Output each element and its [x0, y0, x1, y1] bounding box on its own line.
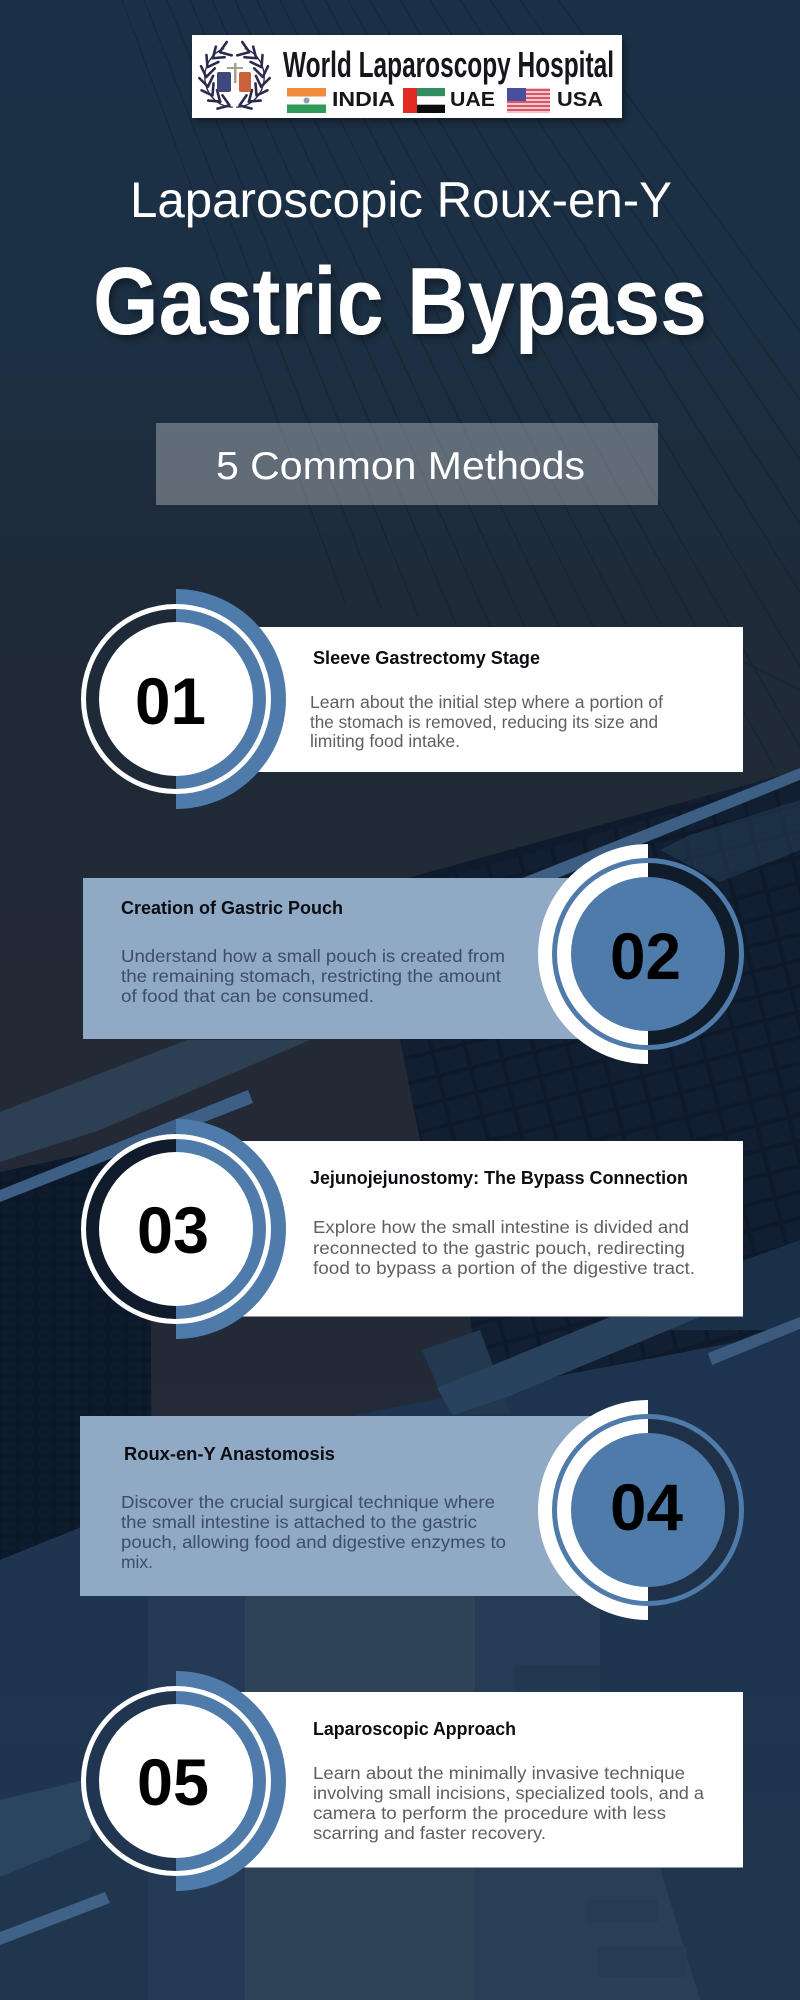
body: involving small incisions, specialized tools, and a [313, 1783, 704, 1803]
body: of food that can be consumed. [121, 986, 374, 1006]
card [240, 627, 743, 772]
badge 04 [538, 1400, 742, 1620]
body [313, 1217, 695, 1278]
decorative bar: right [708, 1317, 800, 1365]
body: reconnected to the gastric pouch, redirecting [313, 1238, 685, 1258]
subtitle box: 5 Common Methods [216, 445, 585, 488]
label: UAE: UAE [450, 89, 495, 111]
decorative bar: lower left [0, 1892, 110, 1945]
subtitle box [156, 423, 658, 505]
badge 03 [84, 1119, 286, 1339]
badge 04: 04 [610, 1470, 683, 1544]
heading: Laparoscopic Approach [313, 1718, 516, 1739]
badge 03: 03 [137, 1193, 209, 1267]
body: mix. [121, 1552, 153, 1572]
flag: India [287, 88, 326, 113]
heading: Jejunojejunostomy: The Bypass Connection [310, 1167, 688, 1188]
body [313, 1763, 704, 1843]
label: India: INDIA [332, 89, 395, 111]
panel: step 4 [80, 1400, 742, 1620]
badge 02: 02 [610, 919, 681, 993]
body [310, 692, 663, 751]
body [121, 1492, 506, 1572]
body: the stomach is removed, reducing its size and [310, 712, 658, 732]
body: limiting food intake. [310, 731, 460, 751]
heading: Creation of Gastric Pouch [121, 897, 343, 918]
body: the remaining stomach, restricting the amount [121, 966, 501, 986]
card [240, 1692, 743, 1868]
body [121, 946, 505, 1006]
flag: UAE [403, 88, 445, 113]
body: pouch, allowing food and digestive enzymes to [121, 1532, 506, 1552]
body: Explore how the small intestine is divided and [313, 1217, 689, 1237]
badge 01 [84, 589, 286, 809]
title line 2: Gastric Bypass [93, 248, 707, 355]
card [80, 1416, 600, 1596]
heading: Roux-en-Y Anastomosis [124, 1443, 335, 1464]
icon: laurel wreath [199, 42, 270, 109]
badge 05: 05 [137, 1745, 209, 1819]
body: Learn about the minimally invasive technique [313, 1763, 685, 1783]
logo name: World Laparoscopy Hospital [283, 44, 614, 85]
label: USA: USA [557, 89, 603, 111]
panel: step 3 [84, 1119, 743, 1339]
panel: step 1 [84, 589, 743, 809]
heading: Sleeve Gastrectomy Stage [313, 647, 540, 668]
badge 02 [538, 844, 742, 1064]
card [83, 878, 603, 1039]
panel: step 5 [84, 1671, 743, 1891]
card [240, 1141, 743, 1316]
body: the small intestine is attached to the gastric [121, 1512, 477, 1532]
logo [192, 35, 622, 118]
decorative bar: left middle [0, 1090, 253, 1202]
badge 01: 01 [135, 664, 206, 738]
body: food to bypass a portion of the digestive tract. [313, 1258, 695, 1278]
title line 1: Laparoscopic Roux-en-Y [130, 172, 672, 228]
flag: USA [507, 88, 550, 113]
panel: step 2 [83, 844, 742, 1064]
badge 05 [84, 1671, 286, 1891]
body: Understand how a small pouch is created from [121, 946, 505, 966]
body: scarring and faster recovery. [313, 1823, 546, 1843]
body: Learn about the initial step where a portion of [310, 692, 663, 712]
decorative bar: upper right [505, 768, 800, 885]
body: camera to perform the procedure with less [313, 1803, 666, 1823]
body: Discover the crucial surgical technique where [121, 1492, 495, 1512]
